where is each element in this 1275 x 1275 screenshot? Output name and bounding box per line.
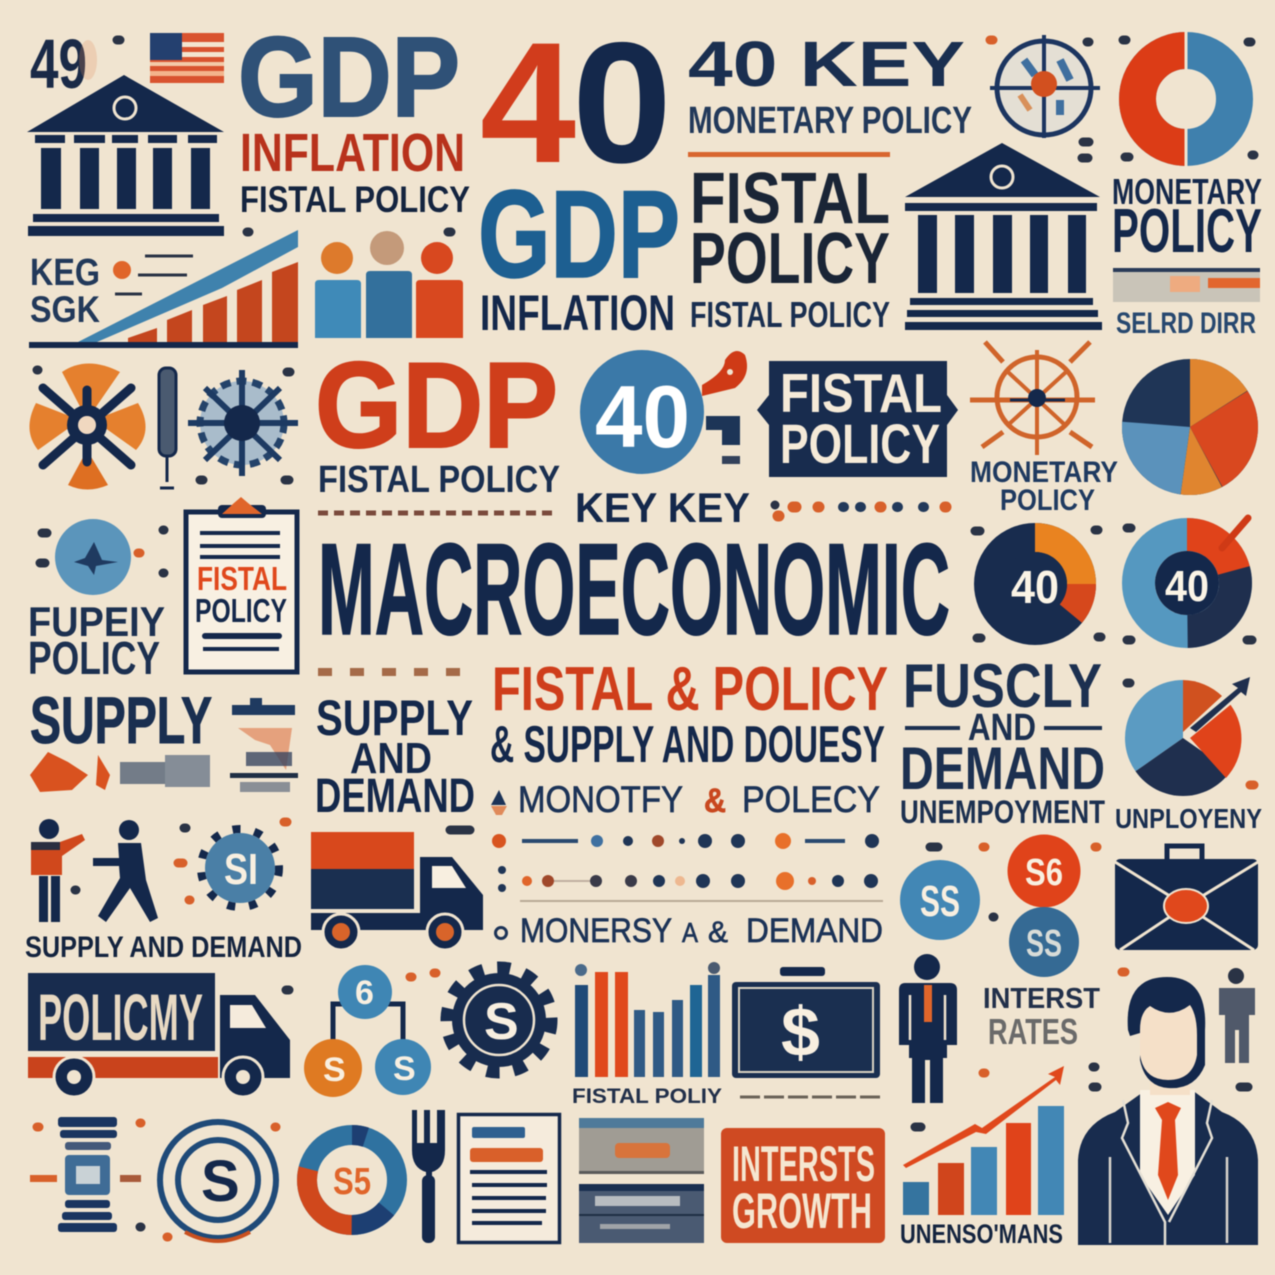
heading: monetary policy right: [1112, 171, 1262, 266]
icon: US flag: [150, 33, 224, 83]
heading: fistal and policy: FISTAL & POLICY: [492, 655, 888, 724]
text: monetary policy small: [970, 456, 1118, 517]
icon: blue circle 40: [580, 350, 747, 474]
image strip: [579, 1118, 704, 1243]
chart: donut bottom: [289, 1117, 415, 1243]
icon: money network: S: [393, 1050, 416, 1088]
text: monersy and demand: DEMAND: [746, 912, 883, 950]
icon: orange wheel: [29, 364, 146, 490]
chart: donut 40: [974, 523, 1096, 645]
icon: gear dollar: SI: [224, 845, 258, 894]
text: monetary policy small: POLICY: [1000, 484, 1095, 517]
chart: donut top right: [1138, 30, 1234, 168]
icons: dollar coins: SS: [1026, 923, 1062, 965]
text: interest rates: [983, 983, 1100, 1052]
text: fupeiy policy: [28, 598, 165, 684]
badge: fistal policy: [757, 361, 958, 477]
icon: three people: [315, 231, 463, 338]
heading: GDP centre blue: GDP: [478, 166, 680, 304]
icon: target dollar: S: [201, 1149, 240, 1214]
heading: supply and demand stacked: [315, 690, 475, 823]
badge: fistal policy: FISTAL: [780, 362, 942, 424]
text: fistal policy mid: FISTAL POLICY: [318, 459, 560, 501]
icon: blue circle 40: 40: [595, 367, 690, 466]
chart: donut pie 40: 40: [1165, 562, 1209, 611]
text: unensomans: UNENSO'MANS: [900, 1219, 1063, 1249]
icon: microphone: [159, 368, 176, 488]
icon: fork: [412, 1110, 445, 1243]
text: fistal poliy: FISTAL POLIY: [572, 1085, 722, 1108]
heading: fuscly and demand: UNEMPOYMENT: [900, 794, 1105, 830]
icon: clipboard: [186, 497, 297, 672]
icon: gear navy: [188, 370, 298, 476]
heading: supply and demand stacked: DEMAND: [315, 770, 475, 823]
text: monotfy and polecy: [491, 779, 880, 820]
icon: gear dollar black: [447, 968, 551, 1072]
big number 40: [480, 7, 672, 199]
icon: economy truck: [28, 973, 290, 1097]
icon: bank building right: [905, 143, 1102, 330]
text: monotfy and polecy: POLECY: [742, 779, 880, 820]
text: KEG SGK: SGK: [30, 289, 100, 330]
text: supply and douesy: & SUPPLY AND DOUESY: [490, 716, 885, 774]
text: fupeiy policy: POLICY: [28, 632, 160, 684]
banner strip: [1113, 268, 1260, 340]
text: KEG SGK: KEG: [30, 252, 100, 294]
icon: scribble row: [30, 698, 298, 792]
heading: fuscly and demand: FUSCLY: [903, 652, 1102, 721]
text: monersy and demand: MONERSY: [520, 912, 672, 950]
heading: supply and demand stacked: SUPPLY: [316, 690, 473, 746]
icon: briefcase: [1115, 846, 1258, 950]
heading: GDP top: GDP: [238, 14, 460, 140]
chart: rising bars bottom right: [903, 1066, 1064, 1215]
icon: small figure: [1219, 968, 1255, 1063]
chart: pie with arrow: [1125, 677, 1250, 796]
text: monetary policy small: MONETARY: [970, 456, 1118, 489]
icon: money network: S: [323, 1051, 346, 1089]
heading: fistal policy stacked: POLICY: [690, 219, 890, 299]
heading: inflation red: INFLATION: [240, 123, 465, 183]
icons: dollar coins: [900, 834, 1080, 977]
text: interest rates: INTERST: [983, 983, 1100, 1015]
red box: interests growth: [721, 1128, 885, 1243]
icon: banknote: $: [781, 993, 820, 1071]
text: supply and demand wide: SUPPLY AND DEMAND: [25, 931, 302, 964]
text: KEG SGK: [30, 252, 193, 330]
chart: donut bottom: S5: [333, 1161, 371, 1203]
icon: target dollar: [160, 1122, 276, 1241]
text: monersy and demand: &: [708, 916, 728, 949]
icons: dollar coins: SS: [920, 877, 960, 926]
chart: vertical bars: [575, 962, 720, 1077]
chart: rising bars with arrow: [29, 230, 298, 348]
red box: interests growth: INTERSTS: [732, 1136, 875, 1192]
big number 40: 4: [480, 7, 576, 199]
chart: donut pie 40: [1128, 518, 1248, 642]
icon: businessman portrait: [1078, 977, 1258, 1245]
heading: fistal policy stacked: [690, 159, 890, 299]
text: monetary policy: MONETARY POLICY: [688, 100, 972, 142]
text: fistal policy small: FISTAL POLICY: [690, 294, 890, 335]
icon: gear dollar: [201, 829, 279, 907]
heading: fuscly and demand: [900, 652, 1105, 830]
heading: supply: SUPPLY: [30, 683, 212, 757]
badge: fistal policy: POLICY: [780, 412, 940, 475]
text: monotfy and polecy: &: [704, 782, 726, 820]
heading: fuscly and demand: AND: [968, 707, 1036, 749]
heading: 40 key: 40 KEY: [688, 28, 965, 100]
dotted decoration: [318, 668, 470, 676]
big number 40: 0: [572, 7, 672, 199]
icon: hourglass: [30, 1117, 141, 1232]
number 49: 49: [30, 25, 87, 103]
heading: supply and demand stacked: AND: [350, 734, 432, 783]
icon: bank building left: [27, 75, 224, 236]
dot rows: [492, 833, 883, 901]
text: monersy and demand: A: [682, 917, 698, 948]
icon: clipboard: POLICY: [195, 592, 287, 629]
heading: GDP red: GDP: [315, 337, 558, 473]
text: fupeiy policy: FUPEIY: [28, 598, 165, 645]
text: fistal policy: FISTAL POLICY: [240, 179, 470, 220]
icon: blue circle emblem: [55, 519, 131, 595]
icon: ship wheel: [970, 342, 1095, 455]
heading: fistal policy stacked: FISTAL: [690, 159, 890, 239]
heading: fuscly and demand: DEMAND: [900, 735, 1105, 802]
icon: document: [458, 1114, 560, 1242]
text: interest rates: RATES: [988, 1011, 1078, 1052]
text: monotfy and polecy: MONOTFY: [518, 779, 683, 820]
icon: two figures: [31, 819, 158, 922]
text: key key: KEY KEY: [575, 484, 750, 531]
text: inflation navy: INFLATION: [480, 285, 675, 341]
icon: standing man: [899, 954, 957, 1103]
text: monersy and demand: [496, 912, 883, 950]
icon: clipboard: FISTAL: [197, 560, 287, 597]
icon: target: [990, 35, 1100, 138]
icon: gear dollar black: S: [484, 993, 519, 1051]
chart: donut 40: 40: [1011, 561, 1059, 613]
chart: pie right: [1143, 380, 1237, 474]
icon: delivery truck centre: [311, 832, 483, 950]
icon: money network: [304, 965, 431, 1097]
icon: economy truck: POLICMY: [38, 980, 203, 1054]
icon: money network: 6: [355, 974, 374, 1012]
red box: interests growth: GROWTH: [732, 1183, 872, 1239]
icon: banknote: [732, 967, 880, 1078]
icons: dollar coins: S6: [1025, 852, 1063, 894]
